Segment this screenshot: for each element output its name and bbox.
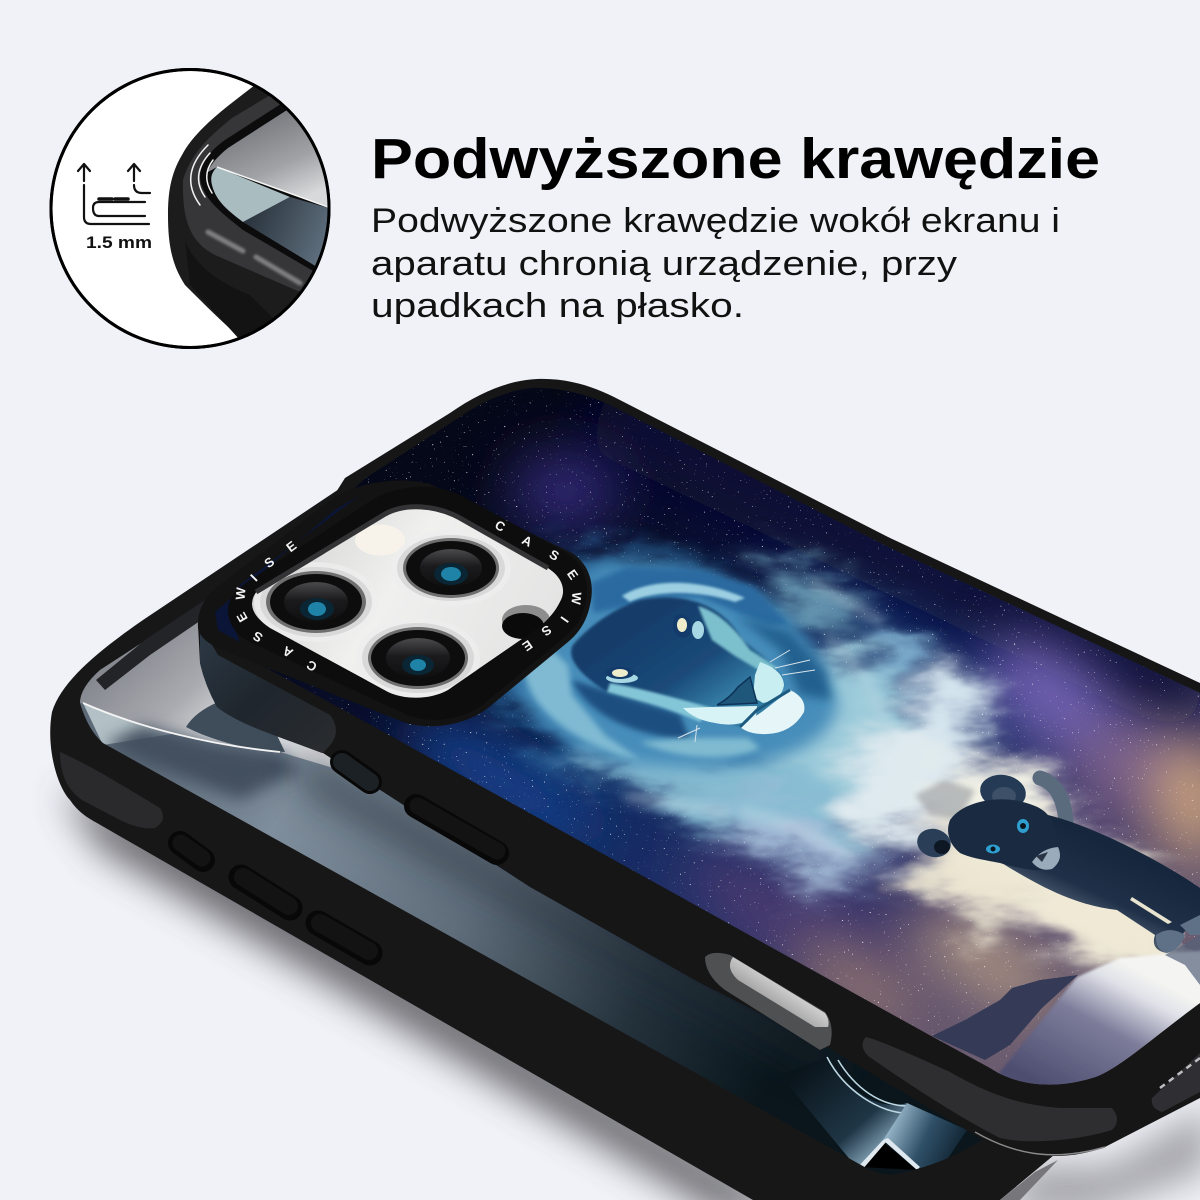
CASEWISE ring text: I — [247, 571, 260, 584]
inset screen dark area — [243, 197, 340, 267]
camera ring — [228, 487, 587, 720]
inset disc outline — [51, 70, 329, 348]
CASEWISE ring text: E — [283, 538, 300, 555]
lion dark lower mane — [572, 680, 690, 740]
cub body — [1000, 815, 1200, 953]
inset lower bumper shading — [185, 240, 280, 340]
inset impact arcs — [191, 145, 213, 205]
cub leg gap — [1130, 897, 1172, 924]
lion upper mane light tuft — [622, 583, 745, 602]
description text: upadkach na płasko. — [371, 287, 744, 325]
front phone bumper — [198, 379, 1200, 1156]
speaker vents — [1152, 1053, 1200, 1112]
lion nose bridge highlight — [698, 606, 778, 672]
lion lower mane light — [640, 738, 760, 757]
mountains — [932, 975, 1078, 1060]
CASEWISE ring text: E — [564, 567, 582, 583]
lion cheek highlight — [607, 683, 712, 722]
CASEWISE ring text: E — [233, 609, 251, 625]
lens left — [254, 562, 378, 642]
inset screen black edge — [200, 100, 340, 275]
back phone buttons — [180, 843, 370, 953]
CASEWISE ring text: W — [233, 586, 249, 600]
mute switch — [342, 762, 370, 782]
distant rock — [915, 780, 975, 820]
inset screen pale area — [211, 167, 290, 222]
camera base — [198, 480, 592, 726]
camera bump — [198, 480, 592, 726]
lion eyes — [606, 612, 704, 683]
phone shadow on background — [60, 790, 1200, 1200]
lake — [985, 950, 1200, 1090]
CASEWISE ring text: S — [547, 546, 562, 564]
inset rim reflection — [208, 232, 300, 283]
cub ear top — [977, 771, 1029, 813]
silver button — [730, 957, 829, 1027]
circular detail inset — [51, 70, 340, 348]
inset screen top — [208, 110, 340, 207]
cub ear left — [914, 825, 954, 861]
lens top right — [391, 530, 511, 606]
CASEWISE ring text: W — [568, 592, 584, 606]
icon: raised lip 1.5 mm diagram — [78, 164, 150, 224]
front phone — [198, 370, 1200, 1156]
camera glass — [252, 507, 563, 698]
cub head — [948, 799, 1061, 870]
speaker holes — [1160, 1058, 1200, 1088]
CASEWISE ring text: C — [492, 517, 508, 535]
lion dark mane beside bridge — [735, 615, 832, 700]
cub eyes — [986, 819, 1029, 854]
cloud streaks — [630, 585, 890, 855]
nebula — [387, 452, 1200, 1048]
inset bumper — [168, 85, 340, 340]
power button — [416, 806, 497, 853]
microphone hole — [502, 605, 550, 639]
description text: Podwyższone krawędzie wokół ekranu i — [371, 202, 1060, 240]
CASEWISE ring text: E — [519, 637, 535, 655]
lens bottom — [356, 618, 480, 698]
back phone screen — [80, 622, 982, 1174]
lion lower lip — [683, 706, 757, 725]
bottom corner grip — [862, 1037, 1117, 1141]
cub — [914, 771, 1200, 985]
cub paws — [1156, 915, 1200, 953]
artwork: lion and cub in space — [265, 388, 1200, 1085]
cub tail — [1040, 778, 1066, 822]
silent switch cutout — [705, 953, 832, 1050]
CASEWISE ring text — [233, 517, 584, 675]
lion chin — [740, 690, 804, 734]
lion face — [571, 597, 785, 727]
back phone bumper — [50, 465, 1060, 1200]
lion left mane tufts — [525, 650, 640, 760]
bottom highlight — [975, 1132, 1105, 1155]
cub nose — [1036, 852, 1048, 862]
sliver of artwork — [215, 495, 360, 642]
lion muzzle — [753, 662, 784, 703]
back phone top corner grip — [96, 570, 260, 690]
icon label: 1.5 mm — [86, 234, 152, 252]
lion nose — [717, 677, 757, 705]
flash — [355, 524, 405, 556]
CASEWISE ring text: S — [538, 622, 554, 640]
CASEWISE ring text: A — [519, 532, 535, 550]
CASEWISE ring text: S — [250, 628, 265, 646]
cub muzzle — [1032, 847, 1060, 870]
dark band along top edge — [600, 410, 1200, 700]
front phone translucent corner — [200, 625, 336, 753]
inset highlight line — [217, 167, 328, 207]
back phone side strip — [1000, 1160, 1058, 1200]
cub reflection — [1165, 935, 1200, 985]
lion upper mane hair — [590, 567, 790, 625]
inset disc — [51, 70, 329, 348]
CASEWISE ring text: S — [261, 554, 278, 571]
description text: aparatu chronią urządzenie, przy — [371, 245, 957, 283]
CASEWISE ring text: C — [303, 657, 320, 675]
lion mouth — [740, 690, 790, 727]
CASEWISE ring text: I — [558, 614, 572, 625]
inset bumper inner band — [183, 94, 315, 292]
clouds — [478, 526, 1192, 974]
lion mane base — [519, 561, 838, 767]
back phone corner grip — [60, 752, 163, 828]
camera ring inner wall — [256, 507, 548, 592]
inset phone corner — [168, 85, 340, 340]
title: Podwyższone krawędzie — [371, 127, 1100, 191]
star field — [268, 390, 1200, 1073]
CASEWISE ring text: A — [279, 643, 296, 661]
lion — [519, 561, 838, 767]
back phone — [50, 465, 1060, 1200]
lion whiskers — [678, 650, 815, 742]
description text — [371, 202, 1060, 325]
